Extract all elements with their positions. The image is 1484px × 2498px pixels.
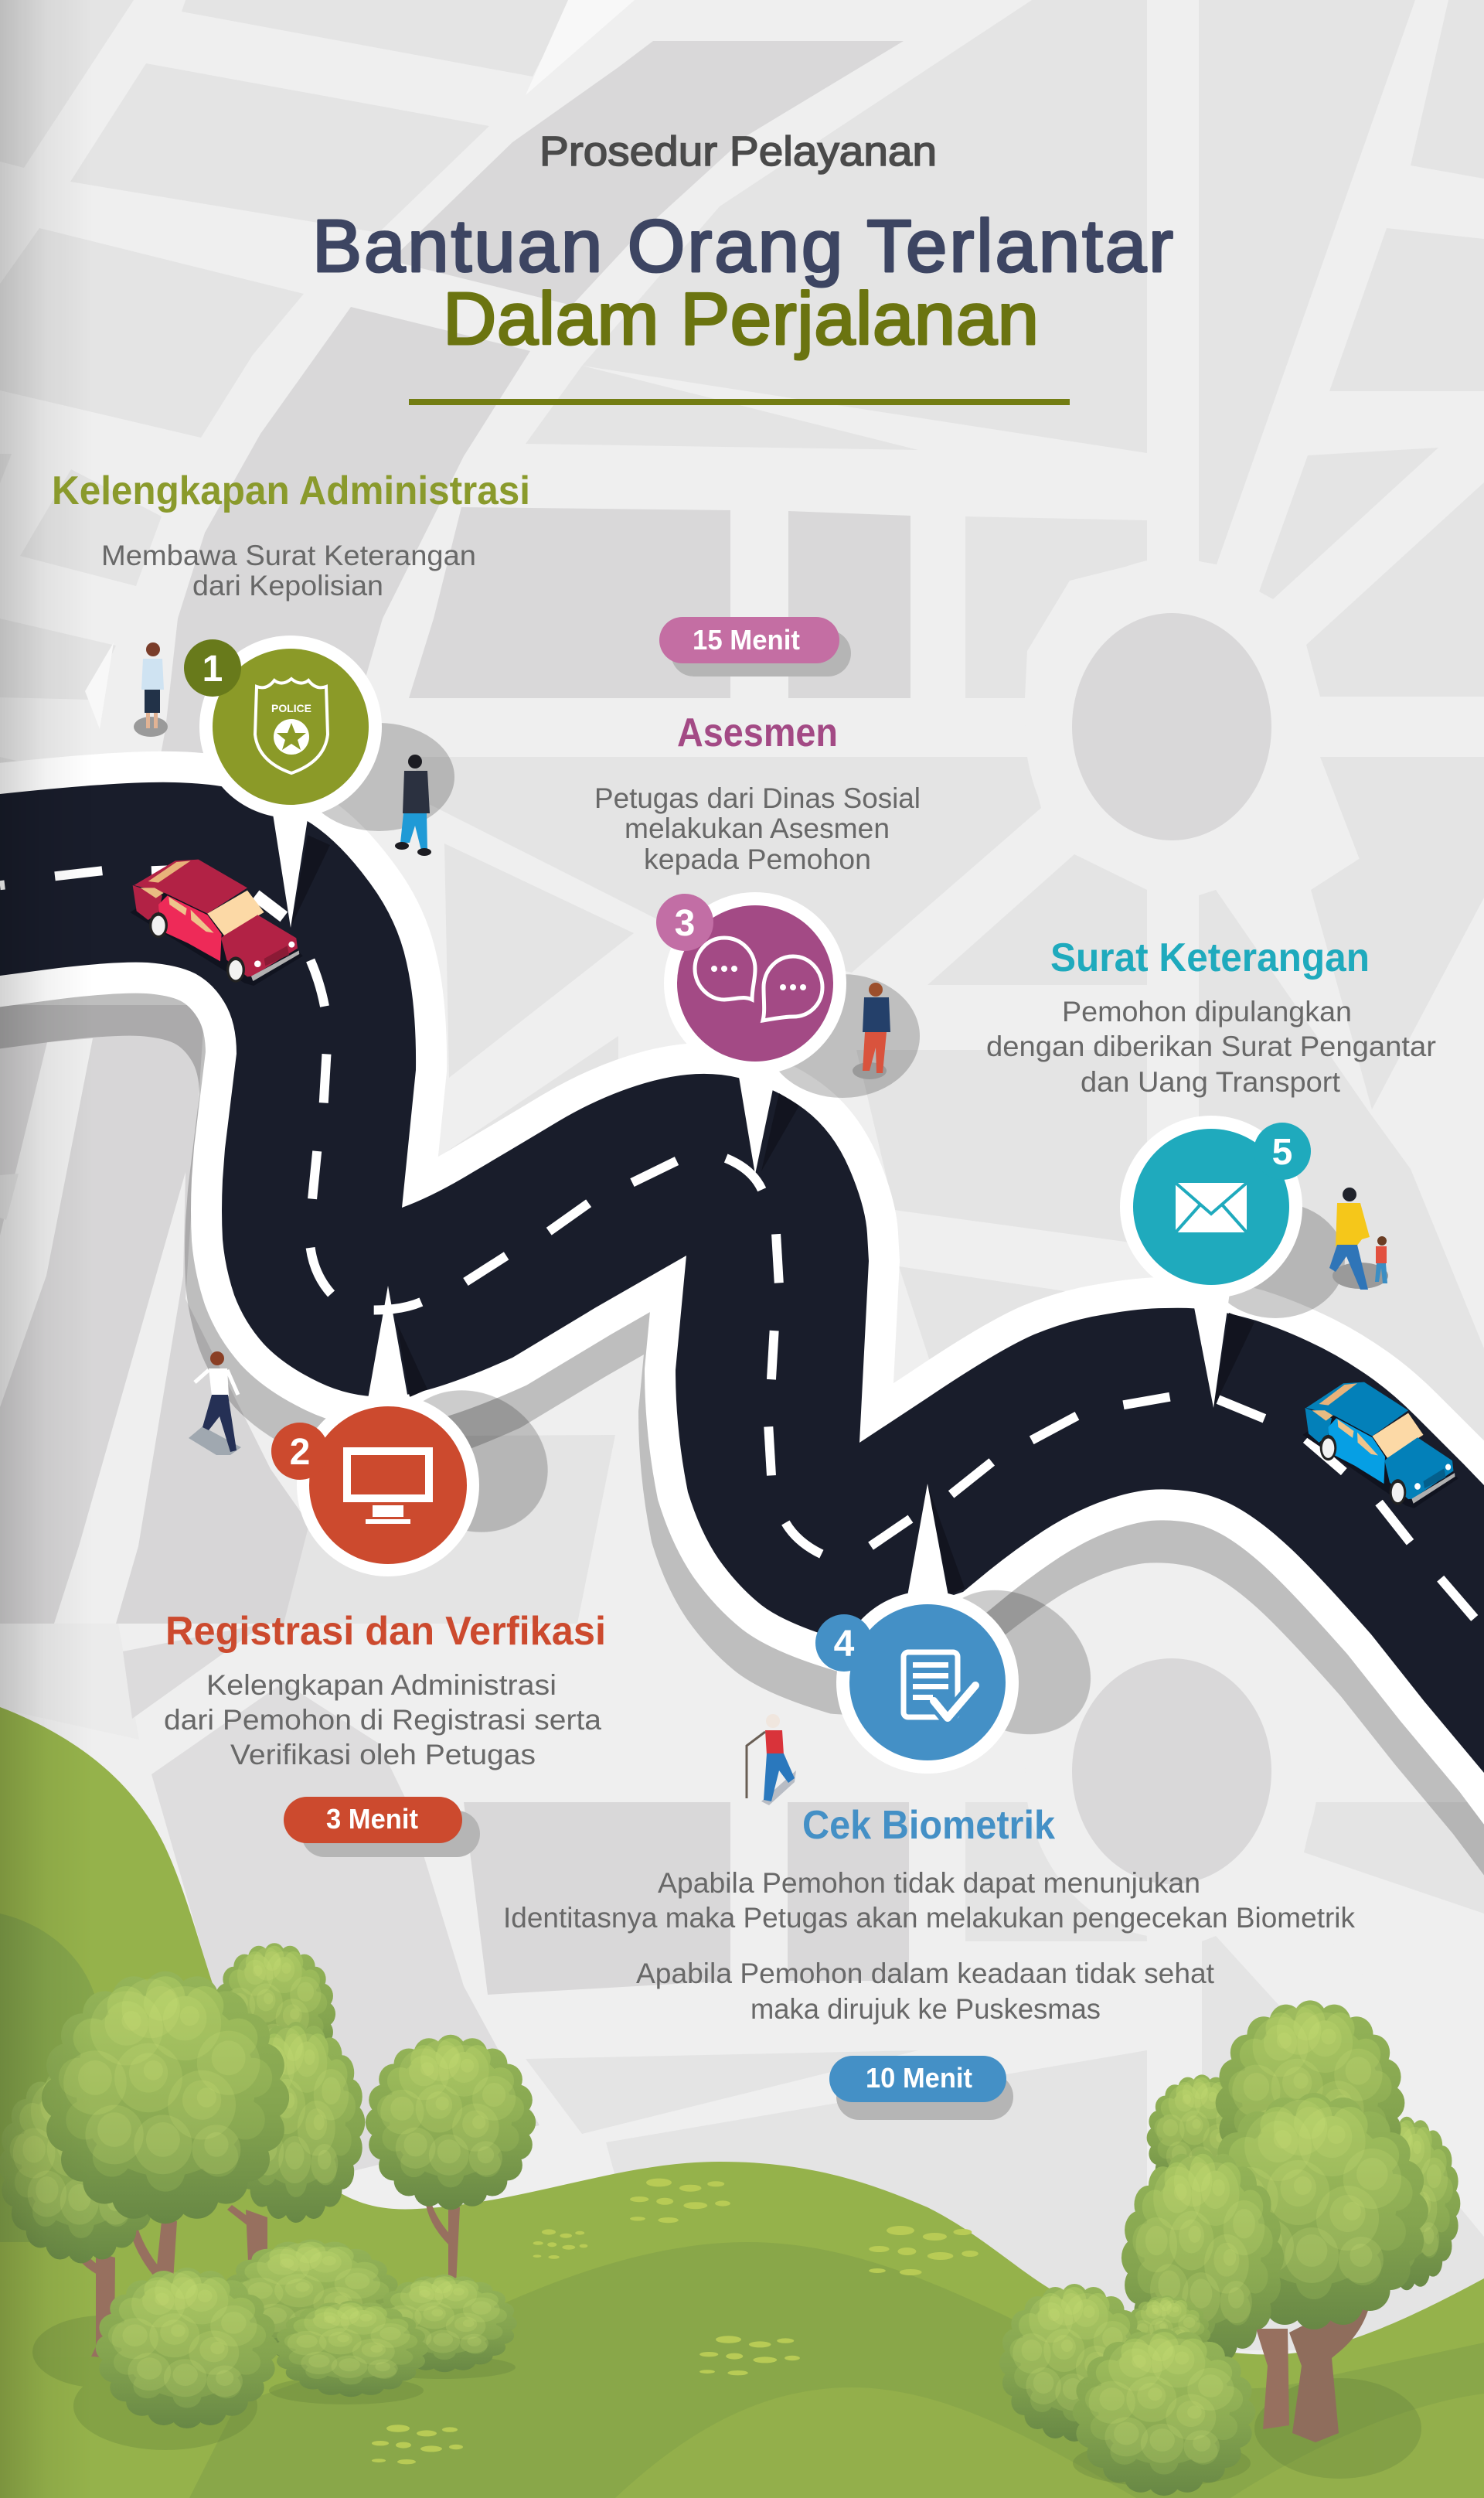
trees: left group: [0, 1943, 536, 2358]
text: Registrasi dan Verfikasi: [164, 1609, 606, 1770]
text: Surat Keterangan: Pemohon dipulangkan: [1062, 996, 1352, 1027]
icon: police badge: [255, 679, 328, 773]
text: Registrasi dan Verfikasi: dari Pemohon di Registrasi serta: [164, 1704, 601, 1736]
bushes: left group: [96, 2239, 517, 2428]
person: man in dark jacket: [395, 755, 431, 856]
title block: [312, 128, 1173, 405]
text: Registrasi dan Verfikasi: Kelengkapan Administrasi: [206, 1669, 556, 1701]
text: Cek Biometrik: Identitasnya maka Petugas akan melakukan pengecekan Biometrik: [503, 1902, 1355, 1934]
person: father and child: [1329, 1188, 1388, 1290]
car: red: [130, 860, 303, 986]
step 3 marker: chat bubbles: 3: [675, 903, 695, 944]
car: blue: [1303, 1382, 1458, 1508]
text: Cek Biometrik: [503, 1803, 1355, 2025]
person: old man with cane: [747, 1714, 796, 1805]
person: woman on phone: [134, 642, 168, 737]
text: Cek Biometrik: Apabila Pemohon tidak dapat menunjukan: [658, 1867, 1200, 1899]
circle shadows: [303, 723, 1345, 1764]
pill: 15 Menit: 15 Menit: [693, 624, 800, 656]
pill: 3 Menit: [284, 1797, 480, 1857]
pill: 3 Menit: 3 Menit: [326, 1803, 418, 1835]
step 4 marker: document check: 4: [834, 1624, 855, 1665]
main title line 1: Bantuan Orang Terlantar: [312, 205, 1173, 288]
text: Asesmen: Asesmen: [677, 711, 838, 755]
icon: speech bubbles: [695, 938, 822, 1021]
pill: 10 Menit: 10 Menit: [866, 2062, 972, 2094]
text: Asesmen: melakukan Asesmen: [625, 813, 890, 844]
icon: monitor: [347, 1451, 429, 1524]
text: Kelengkapan Administrasi: [52, 469, 530, 601]
text: Surat Keterangan: Surat Keterangan: [1050, 935, 1370, 980]
road shadow: [0, 825, 1484, 1898]
text: Asesmen: kepada Pemohon: [644, 843, 871, 875]
trees: right group: [1122, 2000, 1460, 2442]
step 4 marker: document check: [815, 1484, 1019, 1774]
text: Cek Biometrik: Apabila Pemohon dalam keadaan tidak sehat: [636, 1958, 1215, 1989]
text: Asesmen: [594, 711, 921, 875]
subtitle: Prosedur Pelayanan: [539, 128, 937, 175]
text: Surat Keterangan: dengan diberikan Surat Pengantar: [986, 1031, 1436, 1062]
pill: 10 Menit: [829, 2056, 1013, 2120]
main title line 2: Dalam Perjalanan: [443, 278, 1039, 360]
title underline: [409, 399, 1070, 405]
icon: police badge: POLICE: [271, 702, 311, 714]
person: woman in navy jacket: [853, 983, 890, 1079]
text: Surat Keterangan: dan Uang Transport: [1081, 1066, 1341, 1098]
step 2 marker: monitor: [271, 1286, 479, 1576]
text: Cek Biometrik: Cek Biometrik: [802, 1803, 1055, 1848]
step 1 marker: police badge: 1: [203, 649, 223, 690]
step 5 marker: envelope: [1120, 1116, 1311, 1408]
green hills: [0, 1707, 1484, 2498]
text: Kelengkapan Administrasi: Kelengkapan Administrasi: [52, 469, 530, 513]
step 3 marker: chat bubbles: [656, 892, 846, 1174]
road: [0, 782, 1484, 1856]
icon: envelope: [1176, 1183, 1247, 1232]
text: Kelengkapan Administrasi: dari Kepolisian: [192, 570, 383, 601]
left edge fade: [0, 0, 93, 2498]
ground shadows under trees: [32, 2316, 1421, 2486]
step 2 marker: monitor: 2: [290, 1432, 310, 1473]
pointer shading on road: [291, 835, 1254, 1595]
bushes: right group: [999, 2284, 1255, 2496]
text: Cek Biometrik: maka dirujuk ke Puskesmas: [751, 1993, 1101, 2025]
text: Kelengkapan Administrasi: Membawa Surat Keterangan: [101, 540, 476, 571]
step 1 marker: police badge: [184, 636, 382, 928]
grass tufts: [372, 2179, 979, 2464]
pill: 15 Menit: [659, 617, 851, 676]
step 5 marker: envelope: 5: [1272, 1132, 1292, 1173]
road centre dashes: [0, 870, 1475, 1618]
text: Registrasi dan Verfikasi: Verifikasi oleh Petugas: [230, 1739, 536, 1770]
person: man walking: [189, 1351, 241, 1455]
icon: document with check: [904, 1652, 975, 1718]
text: Surat Keterangan: [986, 935, 1436, 1098]
text: Asesmen: Petugas dari Dinas Sosial: [594, 782, 921, 814]
text: Registrasi dan Verfikasi: Registrasi dan Verfikasi: [165, 1609, 606, 1654]
